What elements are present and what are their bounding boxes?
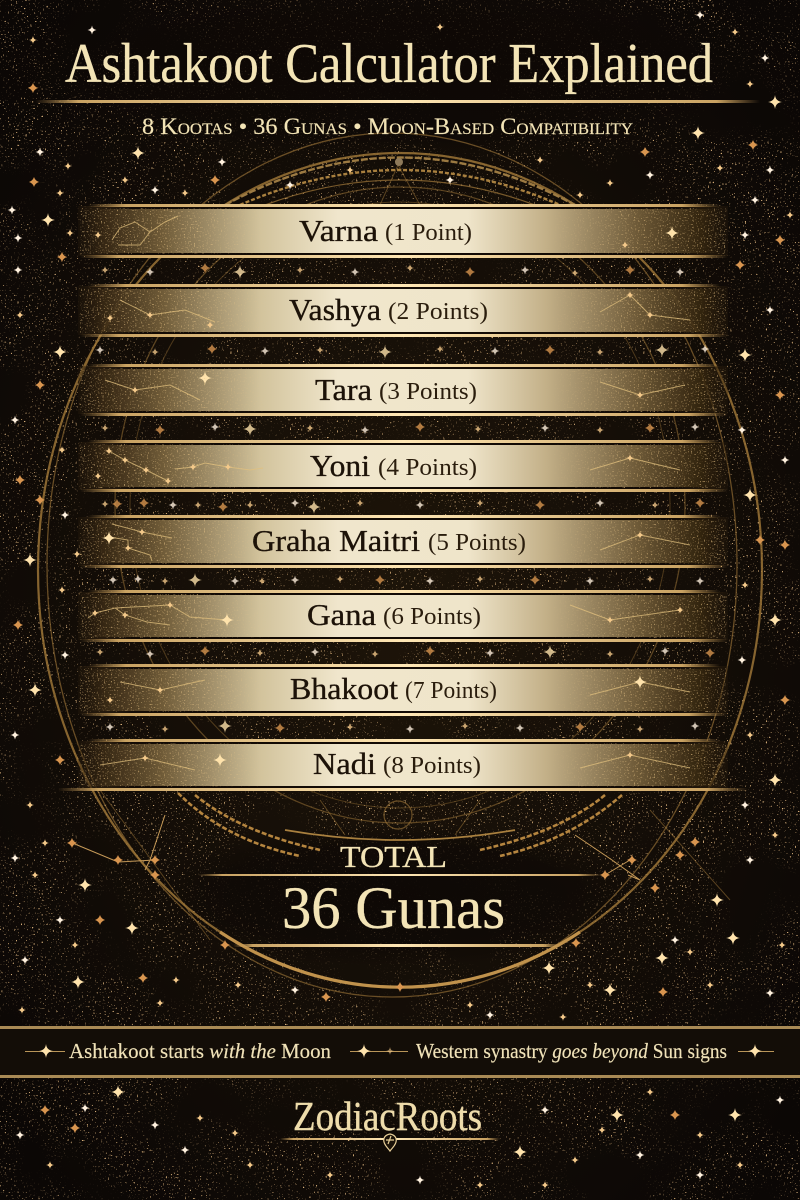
title rule xyxy=(35,100,760,103)
koota band: Graha Maitri: (5 Points) xyxy=(428,530,526,556)
koota band: Bhakoot xyxy=(78,664,728,716)
koota band: Yoni xyxy=(78,440,728,492)
koota band: Vashya: Vashya xyxy=(289,292,381,327)
total label: TOTAL xyxy=(340,839,447,874)
footer strip xyxy=(0,1026,800,1078)
koota band: Varna xyxy=(78,204,728,258)
total block xyxy=(198,839,602,947)
footer note: Sun signs: Western synastry goes beyond Sun signs xyxy=(416,1039,727,1063)
koota band: Gana xyxy=(78,590,728,642)
logo xyxy=(280,1093,500,1151)
total value: 36 Gunas xyxy=(282,875,505,941)
koota band: Tara: Tara xyxy=(315,372,372,407)
wordmark: ZodiacRoots xyxy=(293,1093,482,1139)
koota band: Gana: Gana xyxy=(307,597,376,632)
wheel nodes xyxy=(35,495,765,1002)
band speckle xyxy=(80,208,726,787)
koota band: Varna: (1 Point) xyxy=(385,220,472,246)
subtitle: 8 Kootas • 36 Gunas • Moon-Based Compatibility xyxy=(142,114,633,139)
koota band: Nadi: (8 Points) xyxy=(383,753,481,779)
koota band: Tara xyxy=(78,364,728,416)
star rows between bands xyxy=(96,263,715,734)
koota band: Graha Maitri xyxy=(73,515,728,568)
koota band: Varna: Varna xyxy=(299,213,378,248)
koota band: Gana: (6 Points) xyxy=(383,604,481,630)
icon: logo emblem xyxy=(384,1134,396,1151)
koota band: Vashya: (2 Points) xyxy=(388,299,488,325)
koota band: Yoni: Yoni xyxy=(310,448,370,483)
koota band: Tara: (3 Points) xyxy=(379,379,477,405)
koota band: Graha Maitri: Graha Maitri xyxy=(252,523,420,558)
koota band: Nadi xyxy=(58,739,748,791)
title: Ashtakoot Calculator Explained xyxy=(65,33,713,95)
koota band: Vashya xyxy=(78,284,728,337)
koota band: Bhakoot: Bhakoot xyxy=(290,671,398,706)
koota band: Bhakoot: (7 Points) xyxy=(405,678,497,704)
koota band: Yoni: (4 Points) xyxy=(378,455,477,481)
koota band: Nadi: Nadi xyxy=(313,746,376,781)
footer note: Moon: Ashtakoot starts with the Moon xyxy=(69,1039,331,1063)
zodiac wheel xyxy=(38,133,762,997)
